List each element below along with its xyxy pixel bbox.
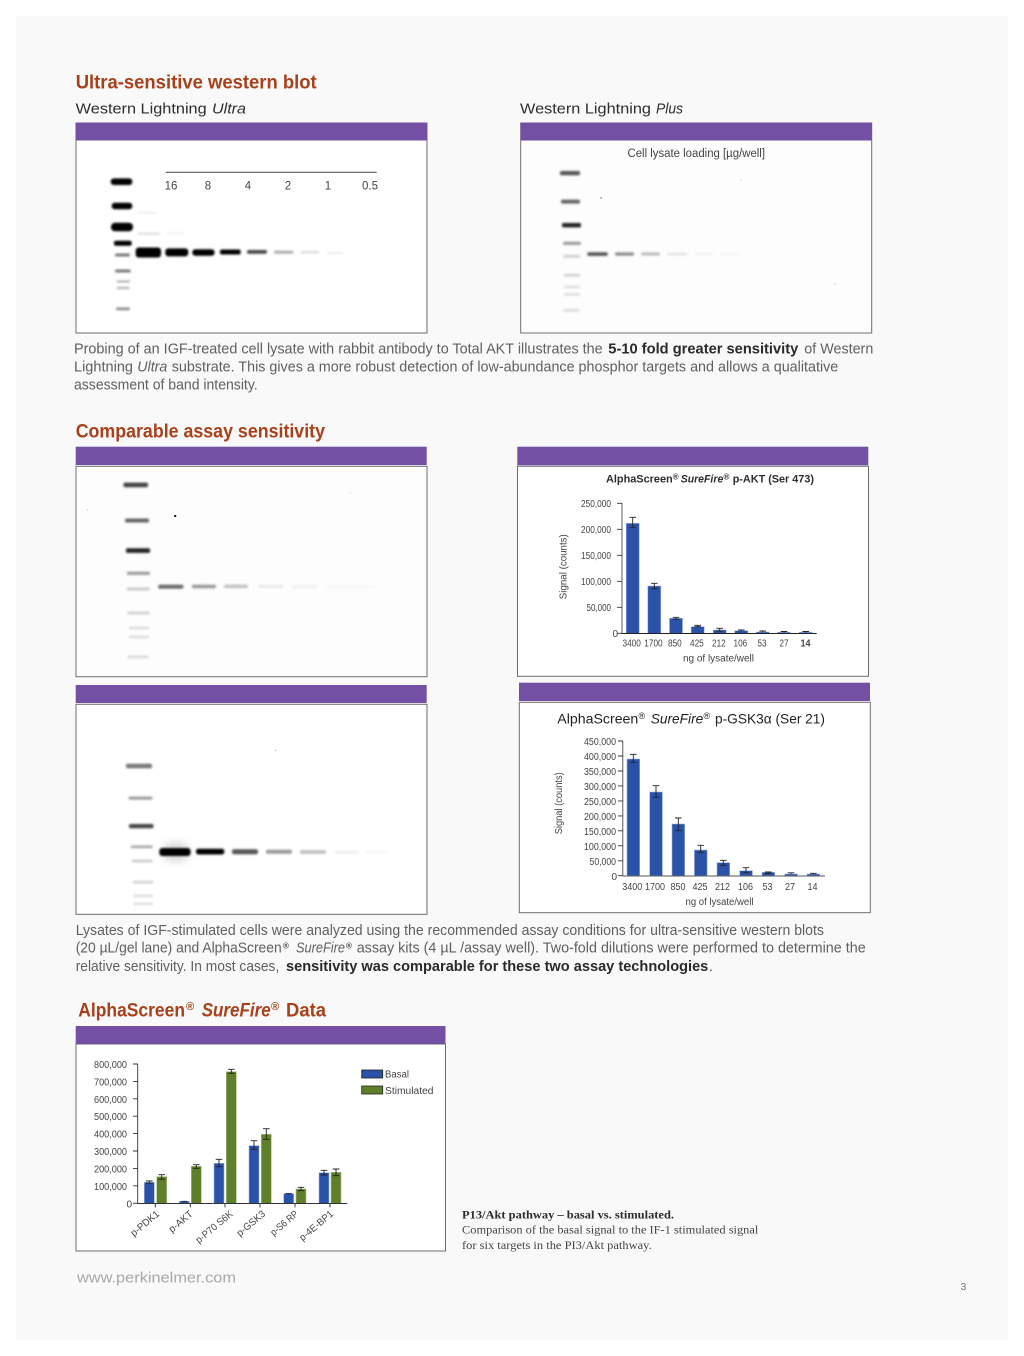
y axis: 350,000 (584, 767, 616, 778)
panel: Western Lightning Ultra blot (76, 122, 427, 333)
x axis: ng of lysate/well (683, 654, 754, 665)
paragraph: assay comparison description: relative sensitivity. In most cases, (76, 958, 279, 975)
y axis: 500,000 (94, 1112, 127, 1123)
y axis: 300,000 (584, 782, 616, 793)
panel: comparable sensitivity blot, strong (76, 685, 427, 914)
y axis: 200,000 (94, 1164, 127, 1175)
ladder bands (111, 178, 133, 310)
basal bars (144, 1146, 329, 1203)
blot specks (87, 492, 350, 517)
y axis: 100,000 (584, 842, 616, 853)
x axis: 850 (670, 882, 686, 893)
x axis: 425 (690, 638, 704, 650)
chart title: ® (724, 472, 730, 482)
error bars (146, 1069, 339, 1201)
y axis: 400,000 (584, 752, 616, 763)
x axis: 1700 (644, 638, 663, 650)
paragraph: assay comparison description (76, 922, 866, 975)
chart title (557, 710, 825, 726)
heading: AlphaScreen SureFire Data (78, 1000, 326, 1021)
chart title: SureFire (651, 710, 704, 726)
sample bands (159, 848, 386, 856)
y axis title: Signal (counts) (554, 772, 565, 834)
legend (362, 1070, 434, 1097)
y axis: 50,000 (590, 857, 616, 868)
x axis: 850 (668, 638, 682, 650)
heading: AlphaScreen SureFire Data: SureFire (202, 1000, 271, 1021)
y axis: 800,000 (94, 1060, 127, 1071)
heading: Comparable assay sensitivity: Comparable assay sensitivity (76, 421, 325, 442)
chart title: p-GSK3α (Ser 21) (715, 710, 825, 726)
chart title: p-AKT (Ser 473) (733, 474, 814, 486)
x axis: 53 (762, 882, 773, 893)
y axis title: Signal (counts) (558, 534, 570, 599)
blot specks (600, 180, 836, 284)
paragraph: assay comparison description: ® (346, 942, 352, 950)
x axis: 27 (785, 882, 795, 893)
bars (627, 759, 820, 876)
y axis (581, 499, 622, 640)
x axis: 425 (692, 882, 708, 893)
y axis: 100,000 (94, 1182, 127, 1193)
sample bands (158, 585, 376, 589)
x axis (622, 876, 825, 908)
y axis (584, 737, 623, 883)
heading: AlphaScreen SureFire Data: AlphaScreen (78, 1000, 185, 1021)
y axis: 450,000 (584, 737, 616, 748)
blot speck (275, 750, 276, 751)
caption: PI3/Akt pathway: for six targets in the PI3/Akt pathway. (462, 1238, 652, 1252)
x axis (129, 1204, 347, 1246)
x axis: 14 (808, 882, 818, 893)
chart title: ® (673, 472, 679, 482)
paragraph: assay comparison description: SureFire (296, 940, 345, 957)
caption: PI3/Akt pathway (462, 1207, 759, 1252)
paragraph: assay comparison description: sensitivity was comparable for these two assay technologies (286, 958, 708, 975)
loading scale line and labels: 1 (325, 180, 331, 192)
x axis: ng of lysate/well (686, 897, 754, 908)
x axis: 106 (738, 882, 753, 893)
y axis: 200,000 (584, 812, 616, 823)
paragraph: western blot description: substrate. This gives a more robust detection of low-abundance phosphor targets and allows a qualitative (172, 359, 838, 376)
y axis: 150,000 (581, 551, 611, 562)
x axis: p-S6 RP (269, 1209, 301, 1239)
y axis: 0 (126, 1199, 132, 1210)
chart title: ® (638, 711, 646, 721)
footer: website: www.perkinelmer.com (76, 1270, 236, 1286)
x axis: 3400 (622, 882, 643, 893)
subheading: Western Lightning Ultra: Ultra (212, 100, 246, 117)
sample bands (587, 252, 740, 256)
y axis: 300,000 (94, 1147, 127, 1158)
paragraph: western blot description (74, 340, 873, 393)
x axis: 212 (715, 882, 730, 893)
subheading: Western Lightning Plus: Western Lightning (520, 100, 651, 117)
paragraph: western blot description: 5-10 fold greater sensitivity (608, 340, 799, 357)
ladder bands (126, 764, 154, 905)
x axis: 53 (758, 638, 767, 650)
x axis: 212 (712, 638, 726, 650)
error bars (630, 754, 817, 874)
subheading: Western Lightning Ultra: Western Lightning (76, 100, 207, 117)
loading scale line and labels: 0.5 (362, 180, 378, 192)
x axis: 14 (800, 638, 811, 650)
x axis: p-AKT (167, 1209, 195, 1235)
x axis: 27 (780, 638, 789, 650)
y axis: 200,000 (581, 525, 611, 536)
y axis: 150,000 (584, 827, 616, 838)
paragraph: assay comparison description: assay kits (4 µL /assay well). Two-fold dilutions were performed to determine the (357, 940, 866, 957)
paragraph: western blot description: Lightning (74, 359, 133, 376)
loading scale line and labels: 4 (245, 180, 252, 192)
panel: Western Lightning Plus blot (520, 122, 872, 333)
chart title (606, 472, 814, 486)
y axis: 250,000 (584, 797, 616, 808)
chart title: AlphaScreen (606, 474, 673, 486)
y axis: 700,000 (94, 1077, 127, 1088)
x axis: p-PDK1 (129, 1209, 162, 1239)
axis label: cell lysate loading: Cell lysate loading [µg/well] (628, 148, 765, 160)
loading scale line and labels (165, 172, 378, 192)
y axis: 100,000 (581, 577, 611, 588)
heading: AlphaScreen SureFire Data: ® (271, 1001, 279, 1013)
chart title: ® (704, 711, 710, 721)
sample bands (136, 212, 343, 258)
loading scale line and labels: 8 (205, 180, 211, 192)
paragraph: western blot description: Ultra (137, 359, 167, 376)
x axis: 3400 (622, 638, 641, 650)
x axis: 1700 (645, 882, 665, 893)
y axis: 250,000 (581, 499, 611, 510)
paragraph: assay comparison description: . (709, 958, 713, 975)
y axis: 400,000 (94, 1130, 127, 1141)
heading: Ultra-sensitive western blot: Ultra-sensitive western blot (76, 72, 317, 93)
paragraph: western blot description: assessment of band intensity. (74, 376, 258, 393)
stimulated bars (157, 1072, 341, 1203)
heading: AlphaScreen SureFire Data: Data (286, 1000, 326, 1021)
band halo (164, 842, 188, 862)
y axis: 50,000 (586, 603, 611, 614)
caption: PI3/Akt pathway: P13/Akt pathway – basal vs. stimulated. (462, 1207, 674, 1221)
paragraph: western blot description: of Western (804, 340, 873, 357)
y axis: 0 (612, 629, 618, 640)
x axis (622, 634, 817, 665)
panel: p-AKT bar chart (517, 447, 868, 676)
y axis (94, 1060, 138, 1210)
legend: Stimulated (385, 1086, 434, 1097)
loading scale line and labels: 2 (285, 180, 291, 192)
error bars (629, 517, 809, 632)
subheading: Western Lightning Plus: Plus (656, 100, 683, 117)
paragraph: assay comparison description: ® (283, 942, 289, 950)
panel: p-GSK3 alpha bar chart (519, 683, 870, 913)
caption: PI3/Akt pathway: Comparison of the basal signal to the IF-1 stimulated signal (462, 1222, 759, 1236)
paragraph: western blot description: Probing of an IGF-treated cell lysate with rabbit antibody to Total AKT illustrates the (74, 340, 603, 357)
x axis: p-4E-BP1 (297, 1209, 336, 1244)
paragraph: assay comparison description: (20 µL/gel lane) and AlphaScreen (76, 940, 282, 957)
bars (626, 523, 812, 633)
panel: comparable sensitivity blot, faint (76, 447, 427, 677)
paragraph: assay comparison description: Lysates of IGF-stimulated cells were analyzed using the recommended assay conditions for ultra-sensitive western blots (76, 922, 824, 939)
y axis: 600,000 (94, 1095, 127, 1106)
ladder bands (124, 483, 150, 658)
footer: page number: 3 (960, 1281, 966, 1293)
chart title: AlphaScreen (557, 710, 638, 726)
loading scale line and labels: 16 (165, 180, 177, 192)
panel: basal vs stimulated bar chart (76, 1026, 445, 1251)
chart title: SureFire (681, 474, 723, 486)
ladder bands (560, 171, 581, 312)
x axis: p-GSK3 (235, 1209, 268, 1239)
legend: Basal (385, 1070, 409, 1081)
y axis: 0 (612, 872, 618, 883)
heading: AlphaScreen SureFire Data: ® (186, 1001, 194, 1013)
x axis: p-P70 S6K (194, 1209, 236, 1246)
x axis: 106 (734, 638, 748, 650)
